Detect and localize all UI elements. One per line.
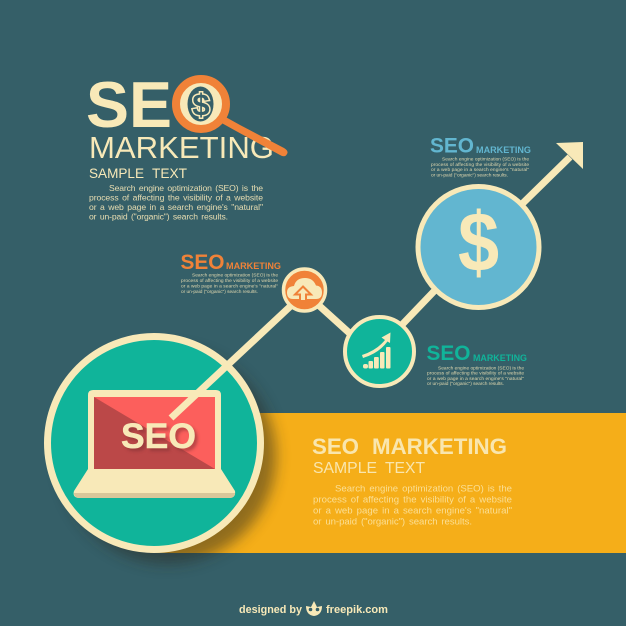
icon: magnifying glass [176, 79, 288, 156]
title SEO: SE [86, 68, 172, 141]
laptop: SEO [124, 420, 199, 459]
orange caption: SEO [180, 251, 224, 274]
main paragraph: or un-paid ("organic") search results. [89, 212, 228, 222]
blue caption: SEO [430, 134, 474, 158]
banner heading [312, 434, 507, 459]
green chart node [345, 317, 414, 386]
banner paragraph [313, 484, 512, 528]
green caption: Search engine optimization (SEO) is the [438, 366, 524, 372]
subtitle [89, 165, 187, 181]
large circle shadow [60, 348, 276, 564]
arrow to top right [522, 142, 583, 204]
icon: growth chart [362, 332, 390, 368]
green caption: SEO [426, 342, 470, 365]
green caption: or un-paid ("organic") search results. [427, 381, 504, 387]
blue caption: or un-paid ("organic") search results. [431, 172, 508, 178]
blue caption: MARKETING [476, 145, 531, 155]
yellow banner [150, 413, 626, 553]
orange cloud node [284, 269, 326, 311]
large circle with laptop [48, 336, 260, 550]
icon: cloud upload [287, 278, 322, 301]
green caption: MARKETING [473, 353, 527, 363]
banner subtitle: TEXT [385, 460, 425, 477]
banner subtitle: SAMPLE [313, 460, 377, 477]
banner paragraph: process of affecting the visibility of a website [313, 494, 512, 506]
laptop [74, 390, 235, 498]
blue caption: Search engine optimization (SEO) is the [442, 156, 529, 162]
orange caption: Search engine optimization (SEO) is the [192, 272, 278, 278]
banner heading: MARKETING [372, 434, 507, 459]
main paragraph [89, 183, 263, 222]
laptop: SEO [121, 417, 196, 456]
blue caption: or a web page in a search engine's "natural" [431, 167, 529, 173]
orange caption: process of affecting the visibility of a website [181, 278, 278, 284]
orange caption [180, 251, 281, 295]
main paragraph: or a web page in a search engine's "natural" [89, 202, 263, 212]
title MARKETING: MARKETING [89, 130, 274, 165]
orange caption: MARKETING [226, 261, 281, 271]
rising trend line [171, 285, 440, 418]
footer credit: freepik.com [326, 604, 388, 616]
green caption [426, 342, 527, 387]
footer credit: designed by [239, 604, 303, 616]
banner paragraph: or a web page in a search engine's "natural" [313, 506, 512, 516]
banner subtitle [313, 460, 425, 477]
icon: magnifying glass: $ [192, 87, 210, 122]
footer credit [239, 601, 388, 616]
subtitle: SAMPLE [89, 165, 144, 181]
orange caption: or a web page in a search engine's "natural" [181, 284, 278, 290]
blue dollar node [418, 186, 539, 308]
green caption: process of affecting the visibility of a website [427, 370, 524, 376]
icon: freepik logo [306, 601, 322, 616]
icon: dollar sign: $ [458, 195, 499, 289]
subtitle: TEXT [152, 165, 187, 181]
banner paragraph: Search engine optimization (SEO) is the [335, 484, 512, 494]
blue caption: process of affecting the visibility of a website [431, 162, 529, 168]
main paragraph: Search engine optimization (SEO) is the [109, 183, 263, 193]
blue caption [430, 134, 531, 178]
green caption: or a web page in a search engine's "natural" [427, 376, 524, 382]
orange caption: or un-paid ("organic") search results. [181, 289, 258, 295]
banner paragraph: or un-paid ("organic") search results. [313, 516, 472, 528]
main paragraph: process of affecting the visibility of a website [89, 192, 263, 202]
banner heading: SEO [312, 434, 359, 459]
